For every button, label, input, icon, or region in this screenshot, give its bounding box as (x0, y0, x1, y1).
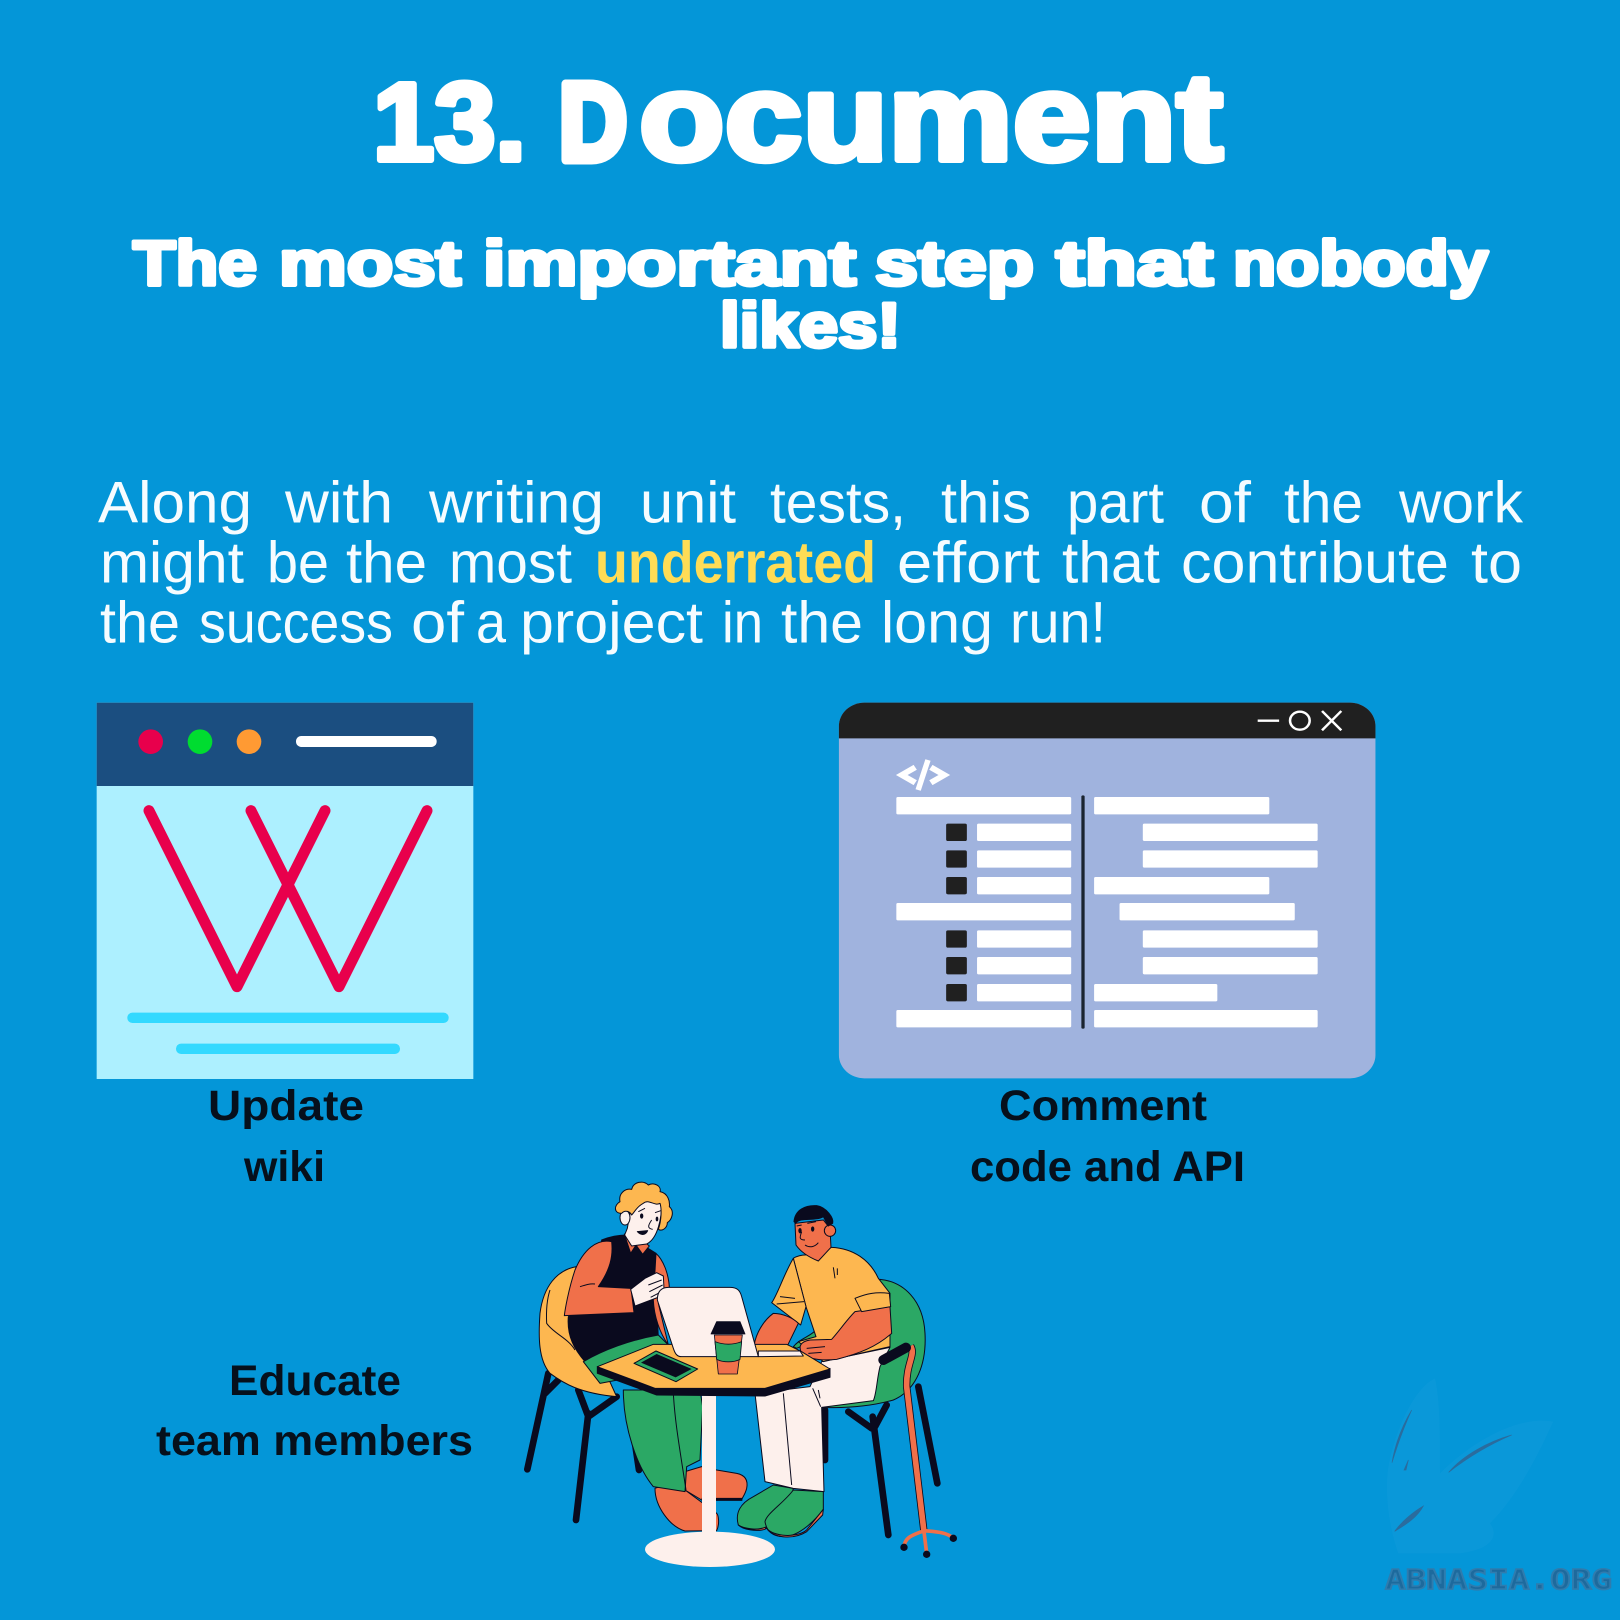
body paragraph: long (881, 590, 993, 656)
title: 13. (373, 61, 526, 184)
label: comment code and API: code and API (970, 1143, 1245, 1191)
body paragraph: with (284, 470, 393, 536)
body paragraph: might (100, 530, 244, 596)
subtitle: that (1056, 229, 1213, 299)
body paragraph: the (1284, 470, 1363, 536)
subtitle: important (483, 229, 856, 299)
label: comment code and API (970, 1082, 1245, 1191)
body paragraph: the (781, 590, 863, 656)
coffee cup (711, 1322, 745, 1374)
body paragraph: work (1398, 470, 1524, 536)
body paragraph: in (722, 590, 763, 656)
subtitle: nobody (1233, 229, 1488, 299)
walking cane (883, 1346, 957, 1558)
tablet (634, 1351, 698, 1382)
body paragraph: contribute (1181, 530, 1449, 596)
body paragraph: the (100, 590, 180, 656)
body paragraph: Along (98, 470, 252, 536)
right chair (793, 1279, 937, 1535)
body paragraph: part (1067, 470, 1164, 536)
label: educate team members (156, 1357, 473, 1465)
subtitle: The (133, 229, 257, 299)
body paragraph: project (520, 590, 703, 656)
title (373, 49, 1223, 187)
subtitle: step (875, 229, 1034, 299)
body paragraph: of (411, 590, 465, 656)
body paragraph: writing (428, 470, 604, 536)
body paragraph: unit (640, 470, 736, 536)
watermark: butterfly logo (1387, 1378, 1553, 1553)
left person (564, 1182, 747, 1531)
subtitle: most (279, 229, 461, 299)
left chair (527, 1267, 639, 1520)
body paragraph: the (346, 530, 427, 596)
body paragraph: that (1062, 530, 1160, 596)
subtitle (133, 229, 1488, 361)
body paragraph: most (449, 530, 572, 596)
illustration: two people at a table with laptop (527, 1182, 957, 1567)
right person (737, 1206, 892, 1537)
title: ocument (639, 49, 1223, 187)
body paragraph: success (199, 590, 393, 656)
body paragraph: underrated (595, 530, 876, 596)
table (597, 1344, 830, 1567)
body paragraph: be (267, 530, 329, 596)
laptop (657, 1287, 803, 1357)
title: D (559, 61, 627, 184)
label: update wiki: Update (208, 1082, 364, 1130)
body paragraph: to (1471, 530, 1522, 596)
body paragraph: of (1199, 470, 1252, 536)
label: update wiki: wiki (243, 1143, 325, 1191)
body paragraph: a (476, 590, 507, 656)
subtitle: likes! (720, 291, 901, 361)
body paragraph: tests, (770, 470, 906, 536)
label: educate team members: team members (156, 1417, 473, 1465)
body paragraph: run! (1010, 590, 1106, 656)
body paragraph: this (941, 470, 1031, 536)
label: update wiki (208, 1082, 364, 1191)
label: educate team members: Educate (229, 1357, 401, 1405)
watermark: ABNASIA.ORG: ABNASIA.ORG (1385, 1563, 1612, 1596)
body paragraph (98, 470, 1524, 656)
body paragraph: effort (897, 530, 1040, 596)
icon: code editor window (839, 703, 1375, 1078)
icon: wiki browser window (97, 703, 473, 1079)
label: comment code and API: Comment (999, 1082, 1207, 1130)
